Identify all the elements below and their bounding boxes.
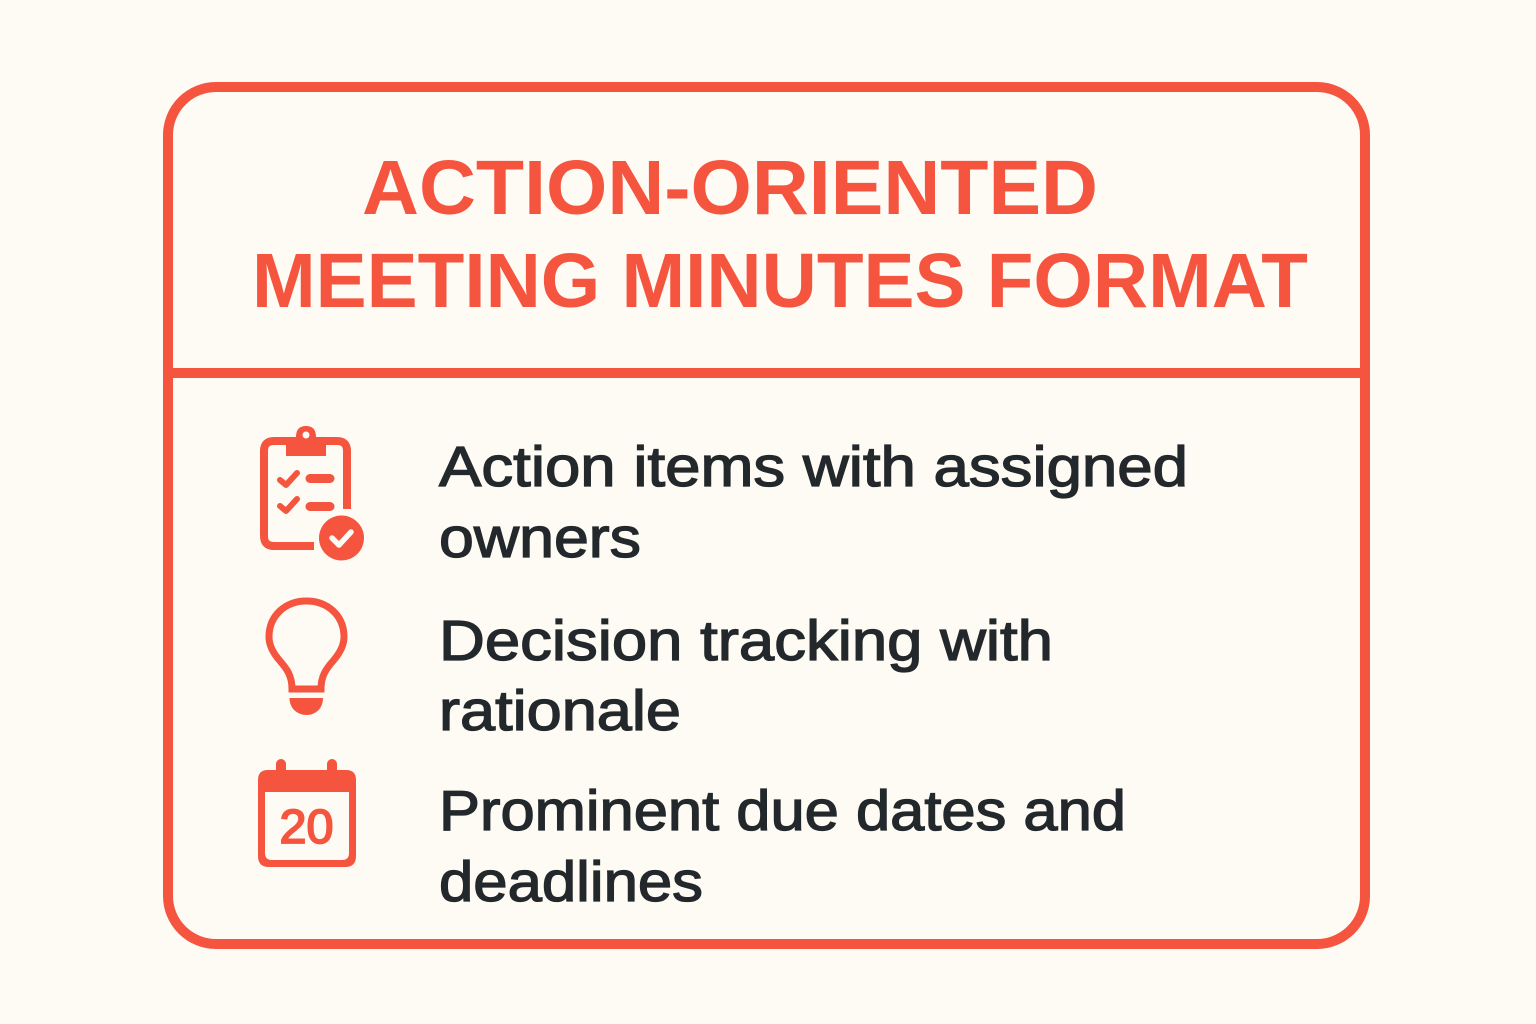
title: ACTION-ORIENTED (362, 145, 1098, 231)
icon: calendar: 20 (280, 801, 334, 854)
icon: light bulb (269, 601, 344, 715)
text: due dates (439, 779, 1126, 914)
title: MEETING MINUTES FORMAT (252, 238, 1308, 324)
text: action items: owners (439, 506, 641, 570)
text: decision tracking: Decision tracking with (439, 609, 1053, 673)
icon: calendar (258, 759, 356, 867)
text: due dates: Prominent due dates and (439, 779, 1126, 843)
text: due dates: deadlines (439, 850, 703, 914)
title (252, 145, 1308, 324)
text: decision tracking (439, 609, 1053, 743)
panel: main card (168, 87, 1365, 944)
text: action items: Action items with assigned (439, 435, 1188, 499)
icon: clipboard checklist (264, 426, 364, 560)
text: action items (439, 435, 1188, 570)
text: decision tracking: rationale (439, 679, 681, 743)
